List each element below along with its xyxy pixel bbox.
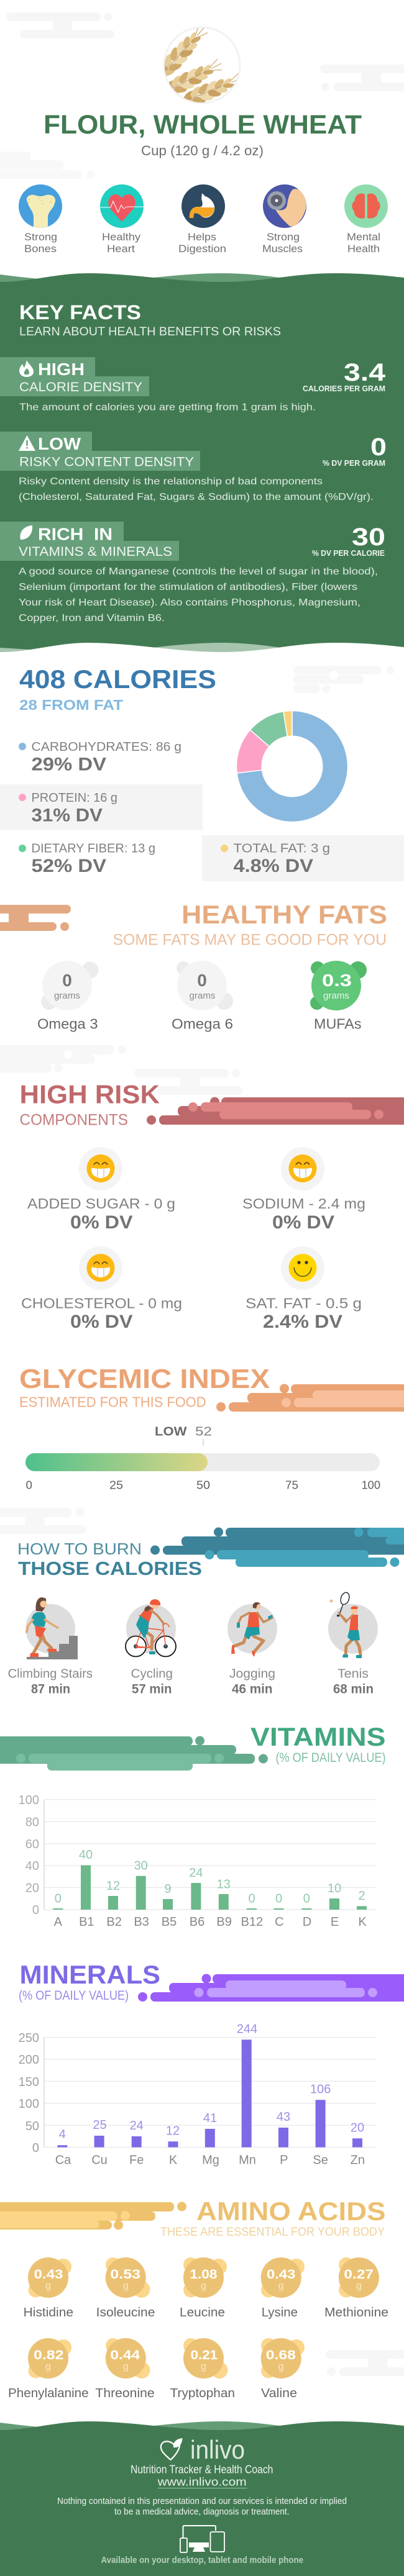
fact: low risky content density: RISKY CONTENT DENSITY	[19, 455, 194, 469]
benefit: helps digestion: Digestion	[178, 243, 226, 255]
fact: high calorie density: HIGH	[38, 360, 85, 379]
amino: histidine: g	[45, 2281, 51, 2292]
cloud decoration: header right	[320, 65, 404, 91]
bar chart: vitamins: A	[54, 1915, 63, 1929]
decorative band: high risk	[147, 1097, 404, 1125]
cloud decoration: above high risk left	[0, 1045, 126, 1073]
gauge scale: 0	[26, 1479, 32, 1492]
disclaimer	[57, 2496, 347, 2517]
bar chart: vitamins: K	[359, 1915, 367, 1929]
fact: high calorie density: The amount of calories you are getting from 1 gram is high.	[19, 402, 316, 412]
activity labels: Climbing Stairs	[7, 1667, 93, 1681]
fat: omega 6: 0	[197, 971, 207, 990]
bar chart: vitamins: B2	[106, 1915, 122, 1929]
logo: inlivo	[161, 2435, 245, 2464]
burn heading line 1: HOW TO BURN	[17, 1540, 142, 1558]
fact: rich in vitamins and minerals: RICH IN	[38, 524, 112, 544]
amino: phenylalanine: g	[45, 2362, 51, 2372]
legend: total fat: TOTAL FAT: 3 g	[234, 842, 330, 856]
bar chart: vitamins: 40	[25, 1859, 39, 1873]
benefit: mental health: Mental	[347, 231, 380, 243]
serving size subtitle: Cup (120 g / 4.2 oz)	[141, 143, 264, 158]
amino: isoleucine: 0.53	[110, 2267, 140, 2282]
calories from fat subheading: 28 FROM FAT	[19, 697, 123, 713]
amino: isoleucine	[96, 2257, 155, 2320]
fact: rich in vitamins and minerals: A good source of Manganese (controls the level of sugar in the blood),	[19, 566, 378, 577]
cloud decoration: above burn	[0, 1508, 86, 1534]
donut chart: calorie sources	[237, 710, 348, 822]
amino: valine: g	[278, 2362, 284, 2372]
logo: inlivo: inlivo	[190, 2435, 245, 2464]
amino: lysine: Lysine	[262, 2305, 298, 2320]
legend: protein	[0, 784, 203, 830]
bar chart: vitamins: 0	[275, 1892, 282, 1905]
bar chart: minerals: 200	[19, 2053, 39, 2067]
benefit: strong muscles	[262, 184, 306, 255]
bar chart: minerals: 250	[19, 2031, 39, 2045]
amino: leucine	[180, 2257, 227, 2320]
amino: leucine: 1.08	[190, 2267, 218, 2282]
fact: low risky content density: % DV PER GRAM	[323, 459, 385, 468]
benefit: mental health: Health	[347, 243, 380, 255]
activity labels: Tenis	[337, 1667, 369, 1681]
fact: low risky content density: LOW	[38, 434, 81, 453]
amino: leucine: g	[201, 2281, 206, 2292]
glycemic value label: 52	[195, 1425, 212, 1439]
benefit: mental health	[344, 184, 388, 255]
fact: rich in vitamins and minerals: Your risk of Heart Disease). Also contains Phosphorus, Magnesium,	[19, 597, 360, 608]
benefit: strong bones: Strong	[24, 231, 57, 243]
bar chart: minerals: 100	[19, 2097, 39, 2111]
title: FLOUR, WHOLE WHEAT	[44, 110, 362, 140]
fat: omega 6	[172, 961, 233, 1032]
risk: sodium	[242, 1147, 365, 1233]
bar chart: minerals: Mn	[239, 2153, 256, 2167]
benefit: strong bones: Bones	[24, 243, 57, 255]
bar chart: minerals: 25	[93, 2118, 107, 2132]
benefit: strong muscles: Muscles	[262, 243, 303, 255]
legend: carbohydrates	[19, 740, 181, 775]
fact: high calorie density: 3.4	[344, 359, 386, 386]
bar chart: vitamins: 9	[164, 1882, 172, 1896]
cloud decoration: calories	[293, 666, 394, 693]
food image: wheat in circle	[163, 26, 241, 104]
bar chart: minerals	[19, 2022, 376, 2167]
key facts heading: KEY FACTS	[19, 301, 141, 324]
risk: saturated fat: 2.4% DV	[263, 1312, 342, 1332]
bar chart: vitamins: 0	[32, 1903, 39, 1917]
benefit: healthy heart: Heart	[107, 243, 135, 255]
benefit: helps digestion: Helps	[188, 231, 216, 243]
burn heading line 2: THOSE CALORIES	[18, 1558, 202, 1579]
icon: devices	[180, 2526, 224, 2552]
benefit: healthy heart: Healthy	[102, 231, 141, 243]
activity labels: 68 min	[333, 1682, 374, 1697]
fat: MUFAs: grams	[323, 991, 349, 1001]
bar chart: minerals: K	[169, 2153, 178, 2167]
bar chart: vitamins: 12	[106, 1879, 120, 1893]
bar chart: minerals: Se	[313, 2153, 328, 2167]
amino: lysine: 0.43	[267, 2267, 295, 2282]
benefit: strong muscles: Strong	[267, 231, 300, 243]
bar chart: vitamins: 100	[19, 1794, 39, 1807]
activity labels: 87 min	[31, 1682, 70, 1697]
fact: high calorie density: CALORIES PER GRAM	[303, 384, 385, 393]
amino: tryptophan: g	[201, 2362, 206, 2372]
activity: cycling	[126, 1599, 176, 1657]
minerals heading: MINERALS	[20, 1960, 160, 1989]
panel: key facts	[0, 273, 404, 655]
bar chart: vitamins: 20	[25, 1882, 39, 1895]
legend: total fat: 4.8% DV	[234, 856, 313, 876]
high risk subheading: COMPONENTS	[20, 1112, 128, 1129]
fat: omega 3: grams	[54, 991, 80, 1001]
vitamins heading: VITAMINS	[250, 1722, 385, 1751]
tagline: Nutrition Tracker & Health Coach	[131, 2464, 273, 2476]
amino: phenylalanine: 0.82	[34, 2348, 63, 2362]
bar chart: minerals: 43	[277, 2110, 290, 2124]
amino: threonine: g	[123, 2362, 129, 2372]
healthy fats heading: HEALTHY FATS	[181, 900, 387, 929]
fat: omega 6: Omega 6	[172, 1016, 233, 1032]
bar chart: vitamins: B1	[79, 1915, 94, 1929]
legend: dietary fiber: 52% DV	[31, 856, 106, 876]
bar chart: vitamins: B12	[241, 1915, 263, 1929]
vitamins subheading: (% OF DAILY VALUE)	[276, 1751, 385, 1765]
amino: histidine: 0.43	[34, 2267, 63, 2282]
gauge scale: 75	[285, 1479, 298, 1492]
bar chart: vitamins	[19, 1794, 376, 1929]
fat: omega 6: grams	[189, 991, 215, 1001]
amino acids subheading: THESE ARE ESSENTIAL FOR YOUR BODY	[160, 2225, 385, 2239]
activity labels: 57 min	[132, 1682, 172, 1697]
fat: MUFAs	[310, 961, 367, 1032]
decorative band: minerals	[138, 1974, 404, 2002]
risk: cholesterol: CHOLESTEROL - 0 mg	[21, 1295, 182, 1312]
amino: threonine: 0.44	[110, 2348, 140, 2362]
legend: protein: 31% DV	[31, 805, 103, 826]
glycemic value label	[155, 1425, 212, 1446]
bar chart: vitamins: 30	[134, 1859, 148, 1873]
high risk heading: HIGH RISK	[20, 1080, 160, 1109]
risk: added sugar	[27, 1147, 175, 1233]
amino: valine: Valine	[261, 2386, 297, 2400]
disclaimer: to be a medical advice, diagnosis or treatment.	[114, 2506, 290, 2517]
bar chart: vitamins: 80	[25, 1816, 39, 1830]
risk: saturated fat	[246, 1246, 362, 1332]
bar chart: minerals: 106	[310, 2083, 331, 2097]
benefit: helps digestion	[178, 184, 226, 255]
footer panel	[0, 2421, 404, 2576]
bar chart: minerals: 4	[59, 2128, 66, 2141]
amino: histidine: Histidine	[24, 2305, 73, 2320]
bar chart: minerals: Ca	[55, 2153, 71, 2167]
legend: carbohydrates: 29% DV	[31, 754, 106, 775]
activity: climbing stairs	[25, 1597, 78, 1659]
decorative band: vitamins	[0, 1736, 268, 1771]
bar chart: minerals: 50	[25, 2120, 39, 2133]
fact: rich in vitamins and minerals: VITAMINS & MINERALS	[19, 545, 172, 559]
activity labels	[7, 1667, 374, 1697]
risk: cholesterol	[21, 1246, 182, 1332]
bar chart: vitamins: 2	[358, 1889, 365, 1903]
fat: MUFAs: 0.3	[322, 971, 352, 990]
bar chart: minerals: 24	[130, 2119, 144, 2133]
cloud decoration: amino right	[326, 2350, 404, 2376]
healthy fats subheading: SOME FATS MAY BE GOOD FOR YOU	[113, 932, 387, 949]
glycemic index heading: GLYCEMIC INDEX	[19, 1364, 270, 1394]
amino: phenylalanine: Phenylalanine	[8, 2386, 89, 2400]
bar chart: minerals: 0	[32, 2141, 39, 2155]
decorative band: healthy fats	[0, 905, 71, 931]
bar chart: vitamins: 60	[25, 1838, 39, 1851]
bar chart: vitamins: D	[303, 1915, 311, 1929]
fact: rich in vitamins and minerals	[0, 522, 385, 624]
fat: MUFAs: MUFAs	[314, 1016, 362, 1032]
amino: tryptophan: Tryptophan	[170, 2386, 235, 2400]
bar chart: minerals: 150	[19, 2075, 39, 2089]
bar chart: vitamins: 10	[328, 1882, 341, 1895]
bar chart: minerals: Zn	[351, 2153, 365, 2167]
gauge scale	[26, 1479, 380, 1492]
cloud decoration: header left	[6, 12, 114, 39]
bar chart: vitamins: B6	[190, 1915, 204, 1929]
bar chart: minerals: 41	[203, 2111, 217, 2125]
bar chart: vitamins: B5	[162, 1915, 177, 1929]
fact: rich in vitamins and minerals: 30	[352, 524, 385, 551]
fact: rich in vitamins and minerals: Copper, Iron and Vitamin B6.	[19, 613, 165, 624]
amino: lysine: g	[278, 2281, 284, 2292]
bar chart: vitamins: B9	[216, 1915, 232, 1929]
amino: lysine	[261, 2257, 305, 2320]
cloud decoration: header lower left	[0, 152, 94, 179]
fact: low risky content density	[0, 432, 387, 502]
amino: phenylalanine	[8, 2338, 89, 2400]
amino: histidine	[24, 2257, 73, 2320]
disclaimer: Nothing contained in this presentation and our services is intended or implied	[57, 2496, 347, 2506]
glycemic gauge bar	[25, 1453, 380, 1471]
bar chart: minerals: 244	[237, 2022, 257, 2036]
amino: tryptophan	[170, 2338, 235, 2400]
bar chart: minerals: 12	[166, 2125, 180, 2138]
amino: isoleucine: Isoleucine	[96, 2305, 155, 2320]
amino acids heading: AMINO ACIDS	[196, 2197, 385, 2226]
risk: added sugar: 0% DV	[70, 1212, 133, 1233]
amino: methionine: g	[356, 2281, 362, 2292]
amino: isoleucine: g	[123, 2281, 129, 2292]
gauge scale: 25	[109, 1479, 123, 1492]
bar chart: vitamins: 40	[79, 1848, 93, 1862]
fact: low risky content density: Risky Content density is the relationship of bad components	[19, 476, 323, 487]
legend: dietary fiber: DIETARY FIBER: 13 g	[31, 842, 155, 856]
fact: low risky content density: (Cholesterol, Saturated Fat, Sugars & Sodium) to the amount (%DV/gr).	[19, 492, 374, 502]
activity: tennis	[328, 1591, 378, 1658]
decorative band: glycemic index	[216, 1384, 404, 1412]
amino: methionine	[324, 2257, 388, 2320]
risk: sodium: 0% DV	[272, 1212, 334, 1233]
bar chart: minerals: Fe	[129, 2153, 144, 2167]
amino: valine	[261, 2338, 305, 2400]
risk: added sugar: ADDED SUGAR - 0 g	[27, 1195, 175, 1212]
glycemic index subheading: ESTIMATED FOR THIS FOOD	[19, 1394, 206, 1410]
bar chart: vitamins: E	[331, 1915, 339, 1929]
risk: sodium: SODIUM - 2.4 mg	[242, 1195, 365, 1212]
bar chart: minerals: 20	[351, 2121, 364, 2135]
key facts subheading: LEARN ABOUT HEALTH BENEFITS OR RISKS	[19, 325, 281, 338]
availability note: Available on your desktop, tablet and mobile phone	[101, 2556, 303, 2565]
amino: threonine	[95, 2338, 155, 2400]
bar chart: minerals: Mg	[202, 2153, 219, 2167]
risk: cholesterol: 0% DV	[70, 1312, 133, 1332]
amino: tryptophan: 0.21	[191, 2348, 218, 2362]
gauge scale: 50	[196, 1479, 210, 1492]
bar chart: vitamins: B3	[134, 1915, 149, 1929]
decorative band: amino acids	[0, 2202, 186, 2229]
gauge scale: 100	[362, 1479, 380, 1492]
website link: www.inlivo.com	[157, 2475, 247, 2488]
bar chart: vitamins: 24	[189, 1866, 203, 1880]
bar chart: minerals: P	[280, 2153, 288, 2167]
fact: rich in vitamins and minerals: Selenium (important for the stimulation of antibodies), Fiber (lowers	[19, 582, 357, 592]
fat: omega 3: 0	[62, 971, 72, 990]
fact: low risky content density: 0	[370, 433, 387, 461]
amino: methionine: 0.27	[344, 2267, 374, 2282]
decorative band: burn	[150, 1528, 404, 1567]
benefit: healthy heart	[100, 184, 144, 255]
bar chart: vitamins: 13	[217, 1878, 231, 1892]
activity labels: Cycling	[131, 1667, 173, 1681]
bar chart: vitamins: 0	[248, 1892, 255, 1905]
benefit: strong bones	[19, 184, 62, 255]
risk: saturated fat: SAT. FAT - 0.5 g	[246, 1295, 362, 1312]
legend: dietary fiber	[19, 842, 155, 876]
fat: omega 3: Omega 3	[37, 1016, 98, 1032]
bar chart: vitamins: 0	[303, 1892, 310, 1905]
cloud decoration: above high risk centre	[134, 1069, 242, 1095]
legend: carbohydrates: CARBOHYDRATES: 86 g	[31, 740, 181, 754]
amino: leucine: Leucine	[180, 2305, 225, 2320]
bar chart: vitamins: 0	[55, 1892, 62, 1905]
activity labels: 46 min	[232, 1682, 272, 1697]
legend: protein: PROTEIN: 16 g	[31, 791, 117, 805]
bar chart: vitamins: C	[275, 1915, 284, 1929]
calories heading: 408 CALORIES	[19, 664, 216, 694]
amino: valine: 0.68	[266, 2348, 296, 2362]
bar chart: minerals: Cu	[91, 2153, 108, 2167]
fact: rich in vitamins and minerals: % DV PER CALORIE	[312, 549, 385, 558]
glycemic value label: LOW	[155, 1425, 187, 1439]
amino: methionine: Methionine	[324, 2305, 388, 2320]
legend: total fat	[202, 835, 404, 881]
fat: omega 3	[37, 961, 98, 1032]
fact: high calorie density: CALORIE DENSITY	[19, 380, 142, 394]
minerals subheading: (% OF DAILY VALUE)	[19, 1989, 129, 2003]
amino: threonine: Threonine	[95, 2386, 155, 2400]
fact: high calorie density	[0, 357, 386, 412]
activity: jogging	[227, 1602, 277, 1677]
activity labels: Jogging	[229, 1667, 275, 1681]
